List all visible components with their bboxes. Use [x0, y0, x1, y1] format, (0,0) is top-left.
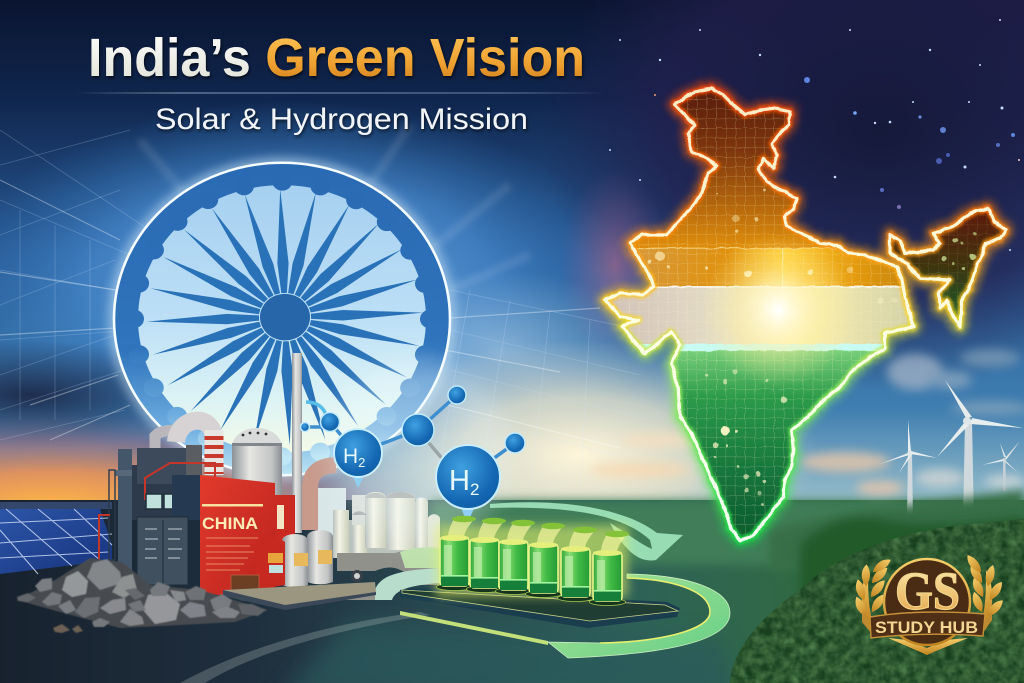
clouds — [590, 349, 1024, 495]
heading: India’s Green Vision — [88, 28, 585, 88]
logo: GS Study Hub — [851, 554, 1004, 655]
solar panel grid backdrop and sun rays — [0, 125, 650, 490]
distillation column — [99, 449, 136, 585]
GS letters: GS — [895, 561, 960, 621]
turbine: middle — [880, 420, 937, 519]
curved exhaust pipes — [155, 421, 214, 475]
badge disc — [884, 559, 970, 645]
gas cylinders — [282, 530, 333, 587]
turbine: small — [982, 441, 1020, 491]
northeast region fill — [890, 212, 1004, 318]
flow arrow: hydrogen to India — [490, 502, 683, 560]
wheel spokes — [142, 184, 428, 450]
map wide glow — [605, 88, 1006, 540]
solar panels on the horizon — [0, 502, 112, 574]
red building with CHINA label — [200, 475, 295, 595]
map outline — [605, 88, 1006, 540]
H2 bubble right: 2 — [470, 480, 479, 499]
storage tank — [232, 428, 282, 495]
flow arrow: green loop — [400, 574, 730, 658]
green hydrogen storage batteries — [436, 516, 629, 606]
name banner: STUDY HUB — [875, 618, 978, 637]
ashoka chakra wheel — [108, 157, 456, 481]
title — [75, 28, 605, 136]
distant hills — [730, 490, 1024, 683]
hydrogen molecules — [300, 360, 525, 540]
H2 bubble right: H — [449, 465, 470, 497]
CHINA label text: CHINA — [202, 515, 258, 533]
H2 bubble left — [334, 429, 382, 488]
laurel left — [851, 555, 892, 622]
upper control housing — [132, 445, 215, 520]
conveyor housing — [337, 547, 442, 600]
India map — [600, 70, 1010, 543]
subtitle: Solar & Hydrogen Mission — [155, 103, 528, 136]
stars — [609, 19, 1020, 261]
H2 bubble right — [436, 445, 500, 523]
tall stack — [292, 353, 302, 533]
wind turbines — [880, 380, 1023, 522]
molecule bonds — [305, 395, 515, 477]
name banner — [862, 612, 992, 638]
ground — [0, 500, 1024, 683]
map data dots — [648, 189, 898, 505]
small hydrogen atoms — [300, 386, 525, 453]
turbine: large — [937, 380, 1023, 522]
wheel hub — [260, 294, 310, 340]
H2 bubble left: 2 — [358, 455, 365, 470]
map tight glow — [605, 88, 1006, 540]
grey cabinet — [137, 517, 188, 585]
red utility cabinet — [231, 538, 285, 590]
distant pale tanks — [318, 488, 440, 560]
rock pile — [17, 558, 268, 633]
factory deck — [223, 582, 376, 610]
battery platform — [400, 588, 680, 628]
copper pipe — [310, 465, 336, 530]
laurel right — [963, 554, 1004, 622]
lower wreath — [888, 638, 968, 655]
tricolour fill — [609, 90, 910, 538]
factory complex — [99, 353, 442, 610]
H2 bubble left: H — [343, 445, 358, 468]
